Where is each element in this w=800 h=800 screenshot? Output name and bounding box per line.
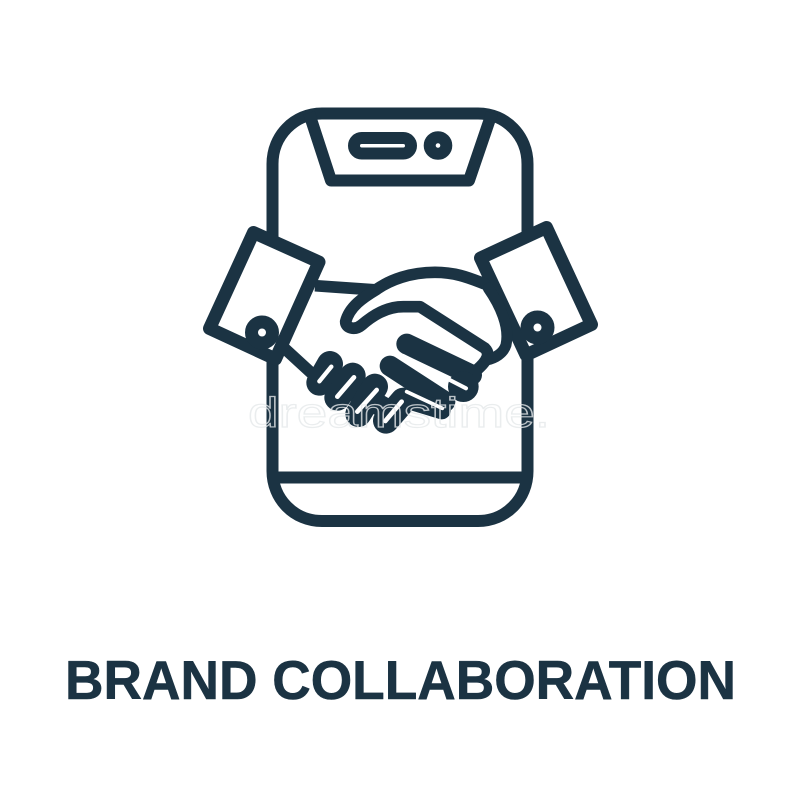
white gaps between fingers	[319, 356, 466, 421]
phone notch with speaker and camera	[309, 113, 492, 180]
right shirt cuff with button	[480, 228, 592, 355]
left shirt cuff with button	[210, 232, 319, 359]
phone body	[272, 114, 528, 521]
right hand thumb outline	[346, 272, 488, 370]
title: BRAND COLLABORATION	[65, 650, 736, 711]
left hand wrist and palm lines	[315, 286, 377, 290]
icon: brand collaboration phone with handshake	[210, 113, 592, 521]
right hand back outline	[487, 288, 507, 360]
clasped fingers	[319, 344, 473, 421]
handshake	[283, 272, 507, 421]
watermark: dreamstime.	[248, 389, 550, 436]
